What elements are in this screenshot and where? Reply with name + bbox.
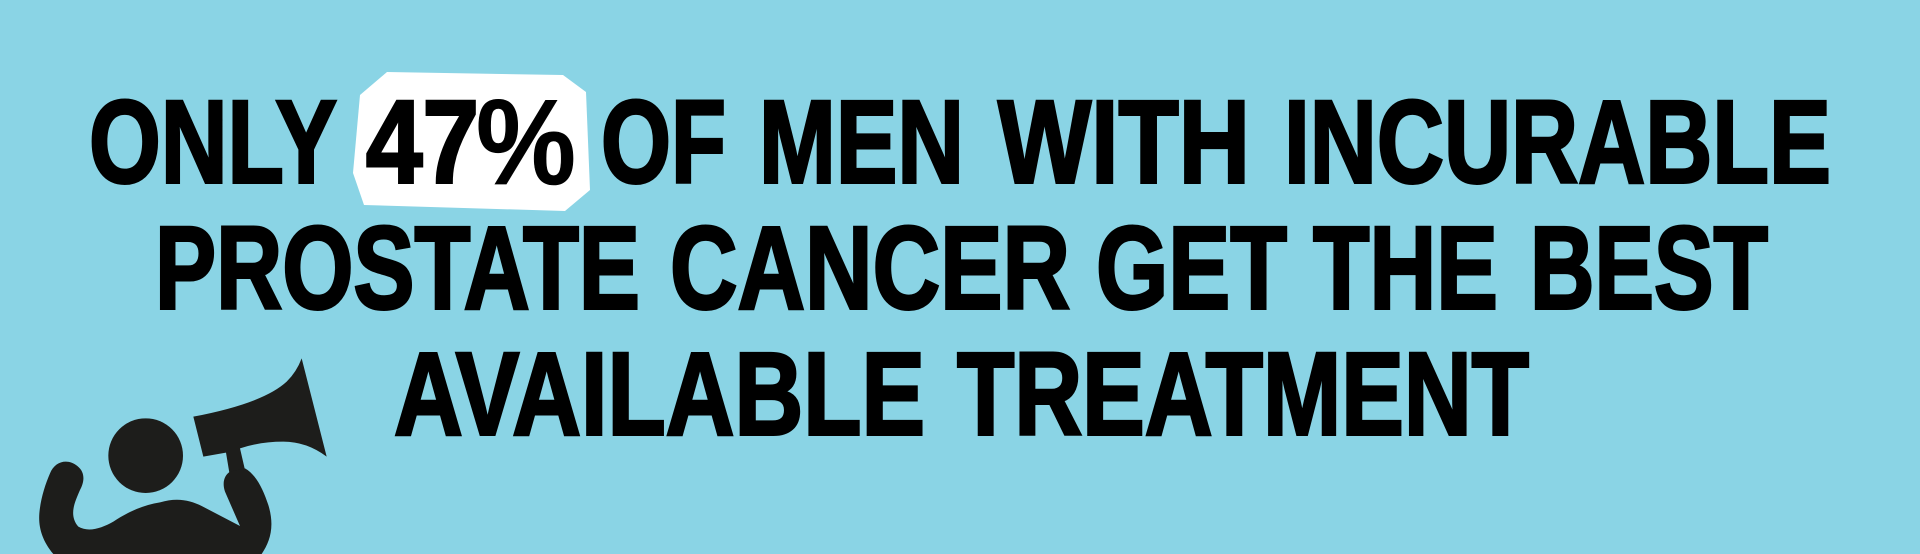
headline line 1 (89, 74, 1831, 210)
headline line 2: PROSTATE (155, 202, 640, 334)
headline line 3: AVAILABLE (394, 328, 925, 460)
headline line 1: ONLY (89, 76, 337, 208)
icon: head (108, 418, 183, 493)
icon: person shouting through a megaphone (39, 358, 327, 554)
headline line 2: BEST (1530, 202, 1768, 334)
headline line 1: MEN (759, 76, 964, 208)
headline line 2: GET (1096, 202, 1287, 334)
headline (89, 74, 1831, 460)
icon: body and raised arms (39, 462, 271, 554)
headline line 2: THE (1313, 202, 1498, 334)
headline line 3 (394, 328, 1529, 460)
icon: megaphone (193, 358, 327, 477)
headline line 1: 47 (366, 76, 479, 208)
headline line 1: OF (601, 76, 726, 208)
headline line 2: CANCER (670, 202, 1070, 334)
headline line 3: TREATMENT (957, 328, 1529, 460)
headline line 2 (155, 202, 1768, 334)
highlight: white torn-paper patch behind 47% (353, 72, 590, 211)
headline line 1: % (476, 74, 576, 210)
headline line 1: WITH (998, 76, 1250, 208)
